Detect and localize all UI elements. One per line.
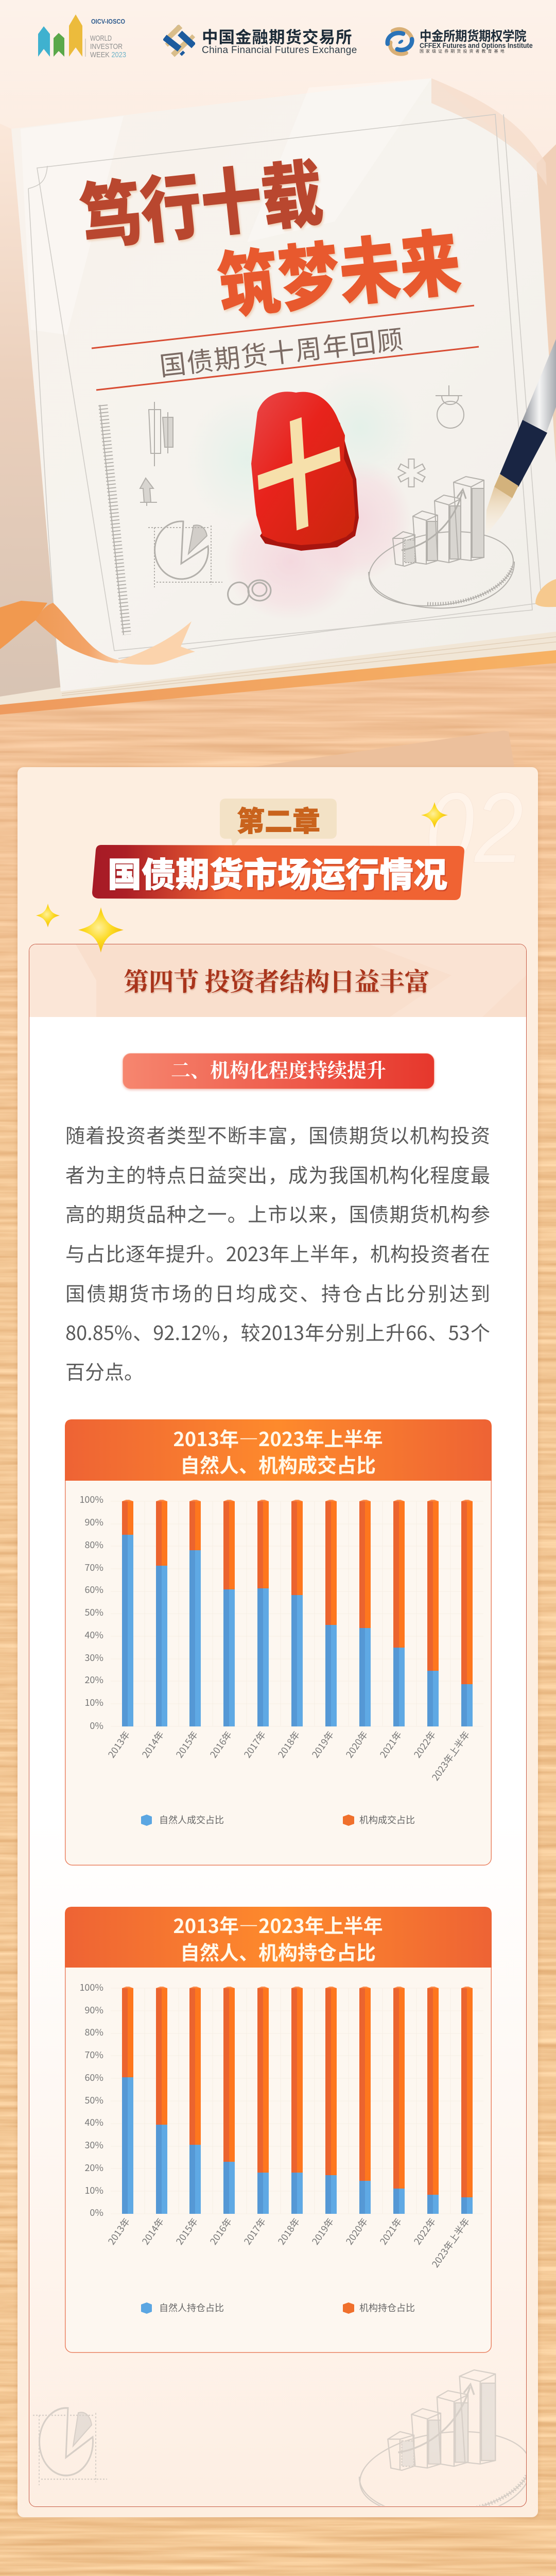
y axis labels: 100% <box>79 1493 103 1506</box>
x axis labels: 2021年 <box>376 1728 405 1760</box>
chart title: 自然人、机构成交占比 <box>180 1450 376 1478</box>
logo: CFFEX weave <box>163 25 195 57</box>
light beams <box>21 116 124 335</box>
sketch: asterisk <box>399 459 424 487</box>
sketch: coins <box>224 579 271 608</box>
x axis labels: 2014年 <box>138 1728 167 1760</box>
x axis labels <box>105 2215 473 2270</box>
x axis labels: 2016年 <box>206 1728 235 1760</box>
bars: institutions <box>122 1987 473 2197</box>
x axis labels <box>105 1728 473 1783</box>
chapter banner <box>92 845 464 900</box>
x axis labels: 2022年 <box>410 1728 439 1760</box>
y axis labels: 20% <box>84 2161 103 2174</box>
panel watermark sketches <box>33 2369 526 2506</box>
sketch: bar chart on coin <box>364 477 518 615</box>
y axis labels: 20% <box>84 1673 103 1686</box>
subheading text: 二、机构化程度持续提升 <box>171 1060 386 1082</box>
y axis labels: 40% <box>84 2115 103 2129</box>
x axis labels: 2020年 <box>342 2215 371 2247</box>
logo: World Investor Week: WORLD <box>90 34 112 43</box>
sketch: up arrow <box>140 478 157 506</box>
chart title <box>173 1423 383 1478</box>
right margin tint <box>536 144 556 474</box>
red seal <box>251 392 359 551</box>
sparkle stars <box>36 802 448 953</box>
pen <box>485 339 556 536</box>
x axis labels: 2019年 <box>308 1728 337 1760</box>
x axis labels: 2023年上半年 <box>428 1728 473 1783</box>
watercolour stains <box>224 502 358 621</box>
header logos <box>38 14 533 59</box>
y axis labels: 80% <box>84 2025 103 2039</box>
y axis labels: 10% <box>84 1696 103 1709</box>
y axis labels: 60% <box>84 2071 103 2084</box>
y axis labels: 30% <box>84 1651 103 1664</box>
subheading pill <box>123 1053 435 1089</box>
x axis labels: 2019年 <box>308 2215 337 2247</box>
body paragraph: 80.85%、92.12%，较2013年分别上升66、53个 <box>65 1317 490 1346</box>
y axis labels <box>79 1980 103 2219</box>
Institute wordmark <box>420 26 533 54</box>
inner page frame <box>28 114 542 658</box>
x axis labels: 2016年 <box>206 2215 235 2247</box>
hero subtitle: 国债期货十周年回顾 <box>158 318 406 383</box>
x axis labels: 2023年上半年 <box>428 2215 473 2270</box>
ribbon left <box>0 601 195 665</box>
x axis labels: 2017年 <box>240 1728 269 1760</box>
seal character: 十 <box>248 368 349 568</box>
body paragraph: 高的期货品种之一。上市以来，国债期货机构参 <box>65 1199 490 1227</box>
y axis labels: 90% <box>84 1515 103 1529</box>
sketch: pie chart <box>148 521 222 587</box>
chart header <box>65 1419 492 1481</box>
section title: 第四节 投资者结构日益丰富 <box>124 968 429 996</box>
main card <box>18 767 538 2517</box>
body paragraph: 与占比逐年提升。2023年上半年，机构投资者在 <box>65 1239 490 1267</box>
y axis labels: 10% <box>84 2183 103 2197</box>
y axis labels: 0% <box>90 1719 103 1732</box>
Institute tagline: 国家级证券期货投资者教育基地 <box>420 48 507 54</box>
legend: natural persons: 自然人持仓占比 <box>159 2301 224 2314</box>
chart header <box>65 1907 492 1968</box>
right page <box>11 78 556 691</box>
tan paper behind card <box>231 731 515 770</box>
hero title line 1: 笃行十载 <box>75 135 327 264</box>
y axis labels: 40% <box>84 1628 103 1641</box>
sketch: ruler <box>100 405 127 635</box>
CFFEX wordmark <box>202 24 357 56</box>
x axis labels: 2013年 <box>105 1728 133 1760</box>
y axis labels: 60% <box>84 1583 103 1596</box>
logo: World Investor Week <box>38 14 126 59</box>
chapter tag text: 第二章 <box>237 799 320 839</box>
bars: natural persons <box>122 2077 473 2214</box>
x axis labels: 2020年 <box>342 1728 371 1760</box>
y axis labels: 100% <box>79 1980 103 1994</box>
y axis labels <box>79 1493 103 1732</box>
bars: natural persons <box>122 1535 473 1726</box>
body paragraph: 随着投资者类型不断丰富，国债期货以机构投资 <box>65 1120 490 1148</box>
hero: open book illustration <box>0 0 556 767</box>
Institute Chinese name: 中金所期货期权学院 <box>420 26 526 45</box>
left page <box>0 124 61 703</box>
body paragraph: 国债期货市场的日均成交、持仓占比分别达到 <box>65 1278 490 1307</box>
CFFEX English name: China Financial Futures Exchange <box>202 45 357 56</box>
CFFEX Chinese name: 中国金融期货交易所 <box>202 24 353 48</box>
y axis labels: 80% <box>84 1538 103 1551</box>
Institute English name: CFFEX Futures and Options Institute <box>420 42 533 49</box>
logo: World Investor Week: WEEK 2023 <box>90 50 126 59</box>
y axis labels: 50% <box>84 1605 103 1619</box>
curled paper strip <box>431 78 547 185</box>
legend: natural persons: 自然人成交占比 <box>159 1813 224 1826</box>
x axis labels: 2015年 <box>172 1728 201 1760</box>
legend: institutions: 机构成交占比 <box>359 1813 415 1826</box>
title rules <box>92 306 474 348</box>
inner panel <box>29 944 527 2507</box>
x axis labels: 2018年 <box>274 2215 303 2247</box>
sketch: small candlesticks <box>149 402 173 466</box>
x axis labels: 2015年 <box>172 2215 201 2247</box>
sketch: money bag <box>436 385 464 428</box>
y axis labels: 0% <box>90 2206 103 2219</box>
y axis labels: 30% <box>84 2138 103 2151</box>
x axis labels: 2022年 <box>410 2215 439 2247</box>
page stack <box>0 629 556 705</box>
body paragraph <box>65 1120 490 1385</box>
x axis labels: 2018年 <box>274 1728 303 1760</box>
hero title line 2: 筑梦未来 <box>213 204 465 333</box>
x axis labels: 2021年 <box>376 2215 405 2247</box>
x axis labels: 2013年 <box>105 2215 133 2247</box>
y axis labels: 70% <box>84 2048 103 2061</box>
chart card: trading share <box>65 1419 492 1866</box>
blurred peach backdrop <box>0 0 556 412</box>
chart title: 2013年—2023年上半年 <box>173 1910 383 1939</box>
chart title: 自然人、机构持仓占比 <box>180 1937 376 1965</box>
body paragraph: 者为主的特点日益突出，成为我国机构化程度最 <box>65 1160 490 1188</box>
y axis labels: 70% <box>84 1561 103 1574</box>
chapter banner text: 国债期货市场运行情况 <box>108 848 447 897</box>
y axis labels: 50% <box>84 2093 103 2107</box>
body paragraph: 百分点。 <box>65 1357 144 1385</box>
chart card: open interest share <box>65 1907 492 2353</box>
x axis labels: 2017年 <box>240 2215 269 2247</box>
book cover <box>0 647 556 715</box>
chapter tag <box>220 799 337 845</box>
x axis labels: 2014年 <box>138 2215 167 2247</box>
section header band <box>29 944 526 1017</box>
chart title <box>173 1910 383 1965</box>
chapter watermark 02: 02 <box>425 772 524 884</box>
y axis labels: 90% <box>84 2003 103 2016</box>
chart title: 2013年—2023年上半年 <box>173 1423 383 1452</box>
legend: institutions: 机构持仓占比 <box>359 2301 415 2314</box>
bars: institutions <box>122 1500 473 1684</box>
ribbon right scrap <box>535 579 556 607</box>
logo: CFFEX Institute ring <box>385 27 414 56</box>
